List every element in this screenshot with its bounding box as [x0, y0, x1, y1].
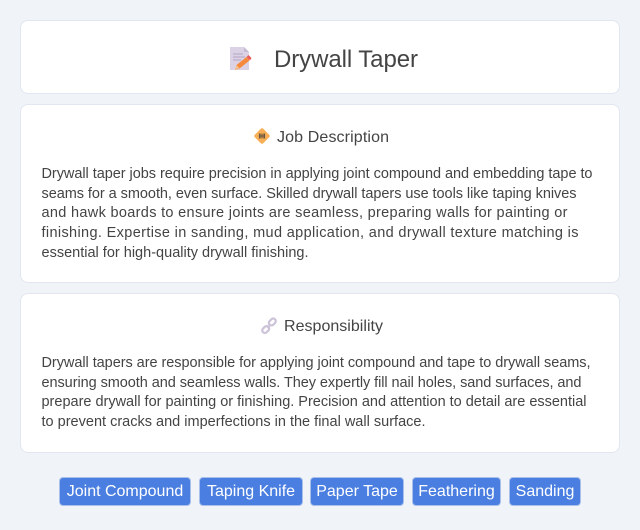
tag: sanding [509, 477, 581, 506]
text block: job description: Drywall taper jobs require precision in applying joint compound and embedding tape to [42, 166, 592, 182]
icon: chain link [261, 317, 277, 334]
text block: job description: finishing. Expertise in sanding, mud application, and drywall texture matching is [42, 225, 578, 241]
tag: paper tape: Paper Tape [316, 483, 398, 500]
heading: responsibility: Responsibility [284, 318, 383, 335]
tag: feathering: Feathering [418, 483, 495, 500]
text block: responsibility: to prevent cracks and imperfections in the final wall surface. [42, 414, 426, 430]
text block: responsibility [42, 355, 590, 430]
text block: job description [42, 166, 592, 261]
tag: paper tape [310, 477, 404, 506]
tag: taping knife: Taping Knife [207, 483, 295, 500]
panel: title card [20, 20, 620, 94]
heading: job description: Job Description [277, 129, 389, 146]
tag: feathering [412, 477, 501, 506]
icon: document with pencil [230, 47, 252, 70]
text block: job description: seams for a smooth, even surface. Skilled drywall tapers use tools like taping knives [42, 186, 576, 202]
tag: joint compound: Joint Compound [67, 483, 183, 500]
text block: responsibility: Drywall tapers are responsible for applying joint compound and tape to drywall seams, [42, 355, 590, 371]
text block: responsibility: prepare drywall for painting or finishing. Precision and attention to detail are essential [42, 394, 586, 410]
text block: responsibility: ensuring smooth and seamless walls. They expertly fill nail holes, sand surfaces, and [42, 375, 582, 391]
panel: job description [20, 104, 620, 283]
text block: job description: and hawk boards to ensure joints are seamless, preparing walls for painting or [42, 205, 568, 221]
panel: responsibility [20, 293, 620, 453]
tag: taping knife [199, 477, 303, 506]
tag: joint compound [59, 477, 191, 506]
text block: job description: essential for high-quality drywall finishing. [42, 245, 308, 261]
icon: orange diamond [254, 128, 270, 144]
tag row [59, 477, 581, 506]
title: Drywall Taper [274, 46, 418, 73]
tag: sanding: Sanding [516, 483, 574, 500]
